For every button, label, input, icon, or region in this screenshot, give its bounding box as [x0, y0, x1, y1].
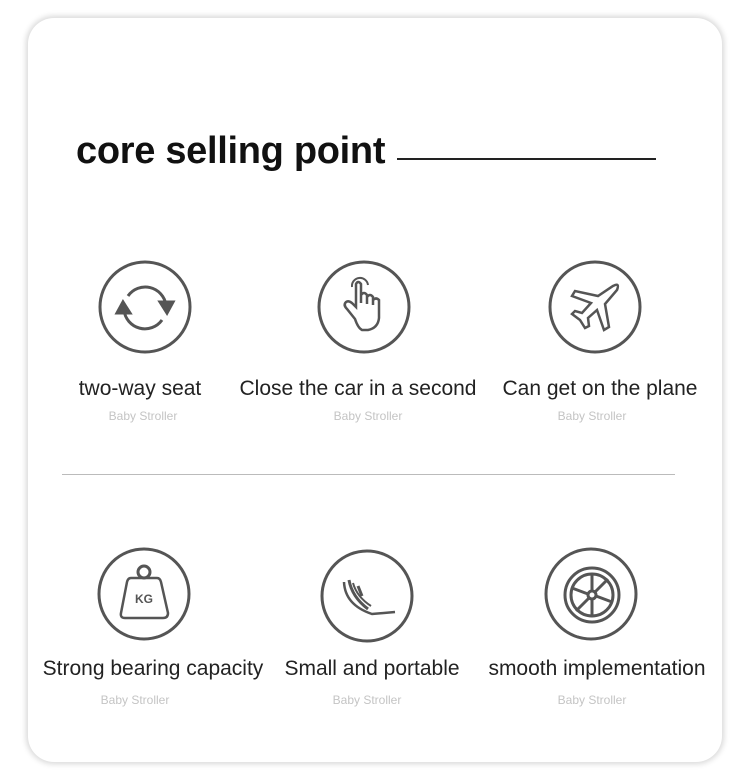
title: core selling point: [76, 130, 385, 172]
text: Close the car in a second: [240, 377, 476, 400]
text: Baby Stroller: [101, 693, 169, 707]
icons: KG: [135, 592, 153, 606]
text: smooth implementation: [488, 657, 706, 680]
labels row 1: two-way seat: [79, 377, 201, 400]
text: Baby Stroller: [333, 693, 401, 707]
text: Baby Stroller: [109, 409, 177, 423]
divider: [62, 474, 675, 475]
text: Small and portable: [284, 657, 460, 680]
text: Can get on the plane: [502, 377, 698, 400]
text: Baby Stroller: [558, 409, 626, 423]
text: Baby Stroller: [334, 409, 402, 423]
title rule: [397, 158, 656, 160]
text: Baby Stroller: [558, 693, 626, 707]
labels row 2: Strong bearing capacity: [43, 657, 263, 680]
